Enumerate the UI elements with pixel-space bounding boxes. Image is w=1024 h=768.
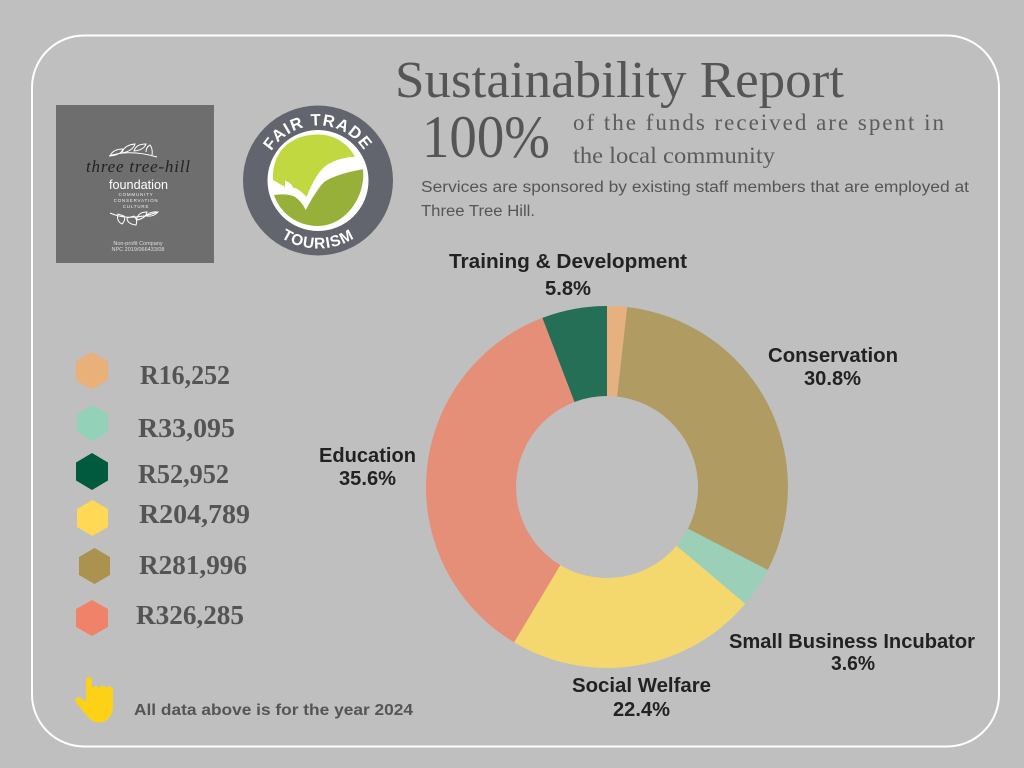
label: social welfare: 22.4% xyxy=(613,699,670,721)
logo: top laurel xyxy=(109,144,157,157)
logo: three tree hill foundation: foundation xyxy=(109,177,168,192)
legend value: R281,996 xyxy=(139,550,247,580)
label: education xyxy=(319,445,416,490)
logo: three tree hill foundation: COMMUNITY xyxy=(119,192,153,197)
label: training and development: 5.8% xyxy=(545,278,591,300)
slice: training and development xyxy=(542,306,607,402)
slice: education xyxy=(426,318,574,642)
icon: coral hexagon xyxy=(76,600,108,636)
slice: small business incubator xyxy=(676,529,768,604)
label: education: Education xyxy=(319,445,416,467)
badge: bottom lettering: TOURISM xyxy=(284,228,354,249)
legend value: R52,952 xyxy=(138,459,229,489)
label: conservation: Conservation xyxy=(768,345,898,367)
label: small business incubator: 3.6% xyxy=(831,653,875,675)
logo: fair trade tourism xyxy=(243,106,393,256)
legend value: R326,285 xyxy=(136,600,244,630)
icon: yellow hexagon xyxy=(77,500,108,536)
footnote: All data above is for the year 2024 xyxy=(134,702,413,719)
label: conservation: 30.8% xyxy=(804,368,861,390)
legend value: R16,252 xyxy=(140,360,230,390)
label: social welfare: Social Welfare xyxy=(572,675,711,697)
label: training and development xyxy=(449,251,687,300)
legend value: R33,095 xyxy=(138,413,235,443)
label: conservation xyxy=(768,345,898,390)
badge: upper green xyxy=(273,134,355,197)
icon: pointing hand xyxy=(75,677,113,722)
slice: social welfare xyxy=(514,546,745,668)
slice: unlabelled orange xyxy=(607,306,627,397)
donut chart xyxy=(426,306,788,668)
legend: amounts xyxy=(76,352,250,636)
label: education: 35.6% xyxy=(339,468,396,490)
label: social welfare xyxy=(572,675,711,721)
icon: bronze hexagon xyxy=(79,548,110,584)
label: training and development: Training & Development xyxy=(449,251,687,273)
slice: conservation xyxy=(617,307,788,570)
label: small business incubator xyxy=(729,631,975,675)
big number: 100% xyxy=(422,104,550,170)
statement line 1: of the funds received are spent in xyxy=(573,110,944,135)
logo: three tree hill foundation xyxy=(56,105,214,263)
icon: orange hexagon xyxy=(76,352,108,390)
title: Sustainability Report xyxy=(395,52,845,109)
logo: three tree hill foundation: CULTURE xyxy=(123,204,149,209)
icon: mint hexagon xyxy=(77,405,108,441)
badge: top lettering: FAIR TRADE xyxy=(262,114,372,150)
logo: three tree hill foundation: three tree-hill xyxy=(86,157,190,176)
text block: services: Services are sponsored by existing staff members that are employed at xyxy=(421,179,970,196)
icon: dark green hexagon xyxy=(76,453,108,490)
label: small business incubator: Small Business Incubator xyxy=(729,631,975,653)
text block: services xyxy=(421,179,970,220)
logo: three tree hill foundation: NPC 2019/066433/08 xyxy=(112,247,164,253)
logo: three tree hill foundation: CONSERVATION xyxy=(114,198,158,203)
text block: services: Three Tree Hill. xyxy=(421,203,535,220)
logo: three tree hill foundation: Non-profit Company xyxy=(113,241,163,247)
statement line 2: the local community xyxy=(573,143,776,168)
logo: bottom laurel xyxy=(110,212,158,225)
legend value: R204,789 xyxy=(139,499,250,529)
heading: 100% statement xyxy=(422,104,944,170)
badge: lower green xyxy=(274,169,363,226)
